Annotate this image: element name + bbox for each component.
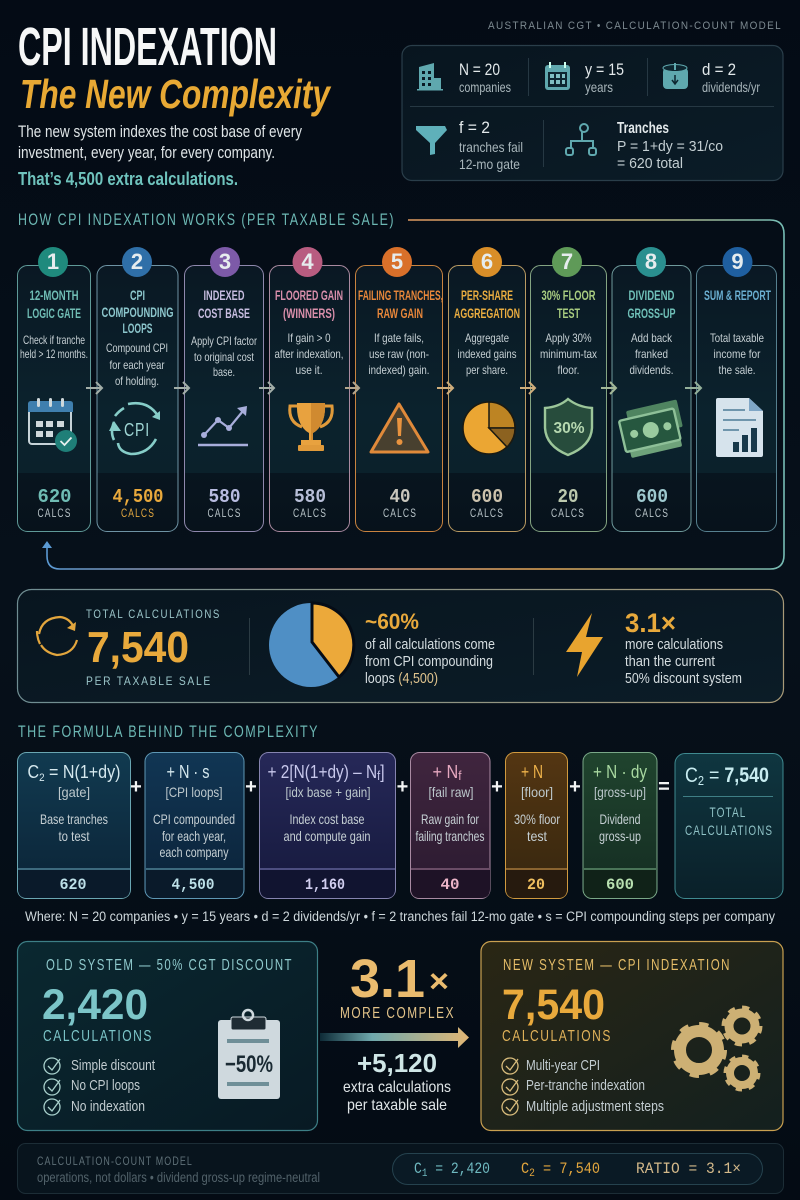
step 4: 4	[301, 249, 314, 274]
icon: calendar	[545, 62, 570, 90]
step 6: per share.	[466, 363, 508, 377]
step 8: franked	[635, 347, 668, 361]
comparison: 3.1x: MORE COMPLEX	[340, 1005, 455, 1022]
operator: +	[245, 776, 257, 798]
subtitle: The New Complexity	[20, 71, 332, 117]
step 7: 30% FLOOR	[542, 288, 596, 303]
term: index base: ]	[380, 762, 384, 782]
step 2	[97, 247, 178, 532]
footer: operations, not dollars • dividend gross-up regime-neutral	[37, 1170, 320, 1185]
heading: how it works: HOW CPI INDEXATION WORKS (PER TAXABLE SALE)	[18, 210, 395, 229]
stat: 3.1x: 50% discount system	[625, 671, 742, 687]
stat: failing tranches: 12-mo gate	[459, 156, 520, 172]
intro text: That’s 4,500 extra calculations.	[18, 169, 238, 189]
step 3: to original cost	[194, 350, 255, 364]
term: fail raw: failing tranches	[416, 828, 484, 844]
step 2: for each year	[110, 358, 164, 372]
step 5: indexed) gain.	[368, 363, 430, 377]
term: gate: C	[28, 762, 40, 782]
step 6	[448, 247, 526, 532]
title	[18, 17, 332, 117]
term: gross-up: [gross-up]	[594, 784, 646, 800]
icon: pie	[463, 402, 515, 454]
stat: tranches	[617, 120, 723, 172]
step 9: income for	[714, 347, 760, 361]
step 4: (WINNERS)	[283, 306, 335, 321]
stat: tranches: P = 1+dy = 31/co	[617, 138, 723, 155]
term: gate: 620	[60, 876, 86, 894]
step 7: 7	[561, 249, 573, 274]
step 6: Aggregate	[465, 331, 509, 345]
stat: tranches: = 620 total	[617, 155, 683, 172]
step 5: CALCS	[383, 508, 417, 520]
step 4: FLOORED GAIN	[275, 288, 343, 303]
term: gate: Base tranches	[40, 811, 108, 827]
results pill: 1	[422, 1168, 428, 1180]
intro text: investment, every year, for every company.	[18, 144, 275, 162]
step 7: minimum-tax	[540, 347, 597, 361]
checklist: No indexation	[71, 1099, 145, 1115]
panel: new system: CALCULATIONS	[502, 1028, 612, 1045]
icon: CPI loop: CPI	[124, 420, 150, 440]
operator: =	[658, 776, 670, 798]
term: floor: [floor]	[521, 784, 553, 800]
step 8: 600	[636, 486, 668, 508]
panel: new system: 7,540	[502, 981, 605, 1029]
step 4: after indexation,	[274, 347, 344, 361]
step 2: Compound CPI	[106, 341, 168, 355]
stat: total calculations: 7,540	[87, 623, 189, 672]
step 7: CALCS	[551, 508, 585, 520]
step 3: CALCS	[208, 508, 242, 520]
step 4	[270, 247, 350, 532]
step 9: 9	[731, 249, 744, 274]
stat: 60 percent: of all calculations come	[365, 637, 495, 653]
step 8: dividends.	[630, 363, 674, 377]
step 1: 12-MONTH	[30, 288, 78, 303]
operator: +	[397, 776, 408, 798]
term: index base: Index cost base	[290, 811, 365, 827]
stat: companies	[459, 60, 511, 95]
title: CPI INDEXATION	[18, 17, 277, 77]
term: total: TOTAL	[710, 804, 746, 820]
stat: dividends	[702, 60, 760, 95]
term: fail raw	[410, 752, 490, 898]
panel: model inputs	[402, 46, 783, 180]
operator: +	[130, 776, 142, 798]
stat: companies: companies	[459, 79, 511, 95]
step 1: LOGIC GATE	[27, 306, 81, 321]
icon: banknotes	[617, 399, 687, 459]
term: index base: f	[377, 768, 381, 783]
step 7	[530, 247, 606, 532]
stat: total calculations: TOTAL CALCULATIONS	[86, 607, 221, 621]
icon: report	[716, 398, 763, 457]
stat: 60 percent: loops (4,500)	[365, 671, 438, 687]
checklist: Multi-year CPI	[526, 1058, 600, 1074]
step 9: Total taxable	[710, 331, 764, 345]
operator: +	[569, 776, 581, 798]
step 4: 580	[294, 486, 326, 508]
step 3	[184, 247, 264, 532]
pie chart: share of calculations	[269, 603, 354, 687]
stat: tranches: Tranches	[617, 120, 669, 137]
checklist: No CPI loops	[71, 1078, 140, 1094]
panel: new system	[481, 942, 783, 1130]
step 1: 1	[47, 249, 59, 274]
icon: shield: 30%	[554, 420, 584, 437]
stat: years: years	[585, 79, 613, 95]
term: CPI loops: 4,500	[172, 876, 214, 894]
icon: CPI loop	[109, 403, 160, 454]
term: floor: 30% floor	[514, 811, 560, 827]
arrow: old to new	[320, 1027, 469, 1048]
panel: new system: NEW SYSTEM — CPI INDEXATION	[503, 957, 731, 974]
step 2: of holding.	[115, 374, 159, 388]
stat: 60 percent: from CPI compounding	[365, 654, 493, 670]
arrow: loop back	[42, 541, 784, 569]
step 8	[612, 247, 691, 532]
term: floor: + N	[521, 762, 543, 782]
comparison: 3.1x: 3.1	[350, 949, 425, 1009]
step 3: COST BASE	[198, 306, 250, 321]
step 2: CPI	[130, 288, 145, 303]
term: fail raw: + N	[432, 762, 461, 782]
comparison: 3.1x	[320, 949, 469, 1114]
stat: 3.1x: more calculations	[625, 637, 723, 653]
step 2: CALCS	[121, 508, 155, 520]
footer: CALCULATION-COUNT MODEL	[37, 1154, 193, 1168]
icon: rising chart	[198, 406, 248, 445]
stat: companies: N = 20	[459, 60, 500, 79]
term: index base: [idx base + gain]	[286, 784, 370, 800]
term: CPI loops: each company	[160, 844, 228, 860]
panel: formula	[18, 752, 783, 898]
step 7: floor.	[558, 363, 580, 377]
stat: 60 percent: ~60%	[365, 609, 419, 634]
step 1: CALCS	[38, 508, 72, 520]
comparison: 3.1x: per taxable sale	[347, 1097, 447, 1114]
panel: step cards	[18, 247, 776, 532]
comparison: 3.1x: ×	[429, 963, 449, 999]
step 6: indexed gains	[458, 347, 516, 361]
term: CPI loops	[145, 752, 244, 898]
icon: funnel	[416, 126, 447, 155]
term: CPI loops: [CPI loops]	[166, 784, 222, 800]
icon: tree	[566, 124, 596, 155]
icon: dividend pot	[663, 63, 688, 89]
step 6: PER-SHARE	[461, 288, 513, 303]
stat: dividends: dividends/yr	[702, 79, 760, 95]
panel: old system: OLD SYSTEM — 50% CGT DISCOUNT	[46, 957, 293, 974]
step 2: COMPOUNDING	[102, 305, 174, 320]
step 8: CALCS	[635, 508, 669, 520]
term: total: 2	[698, 773, 704, 788]
step 5: 5	[391, 249, 403, 274]
step 6: AGGREGATION	[454, 306, 520, 321]
comparison: 3.1x: +5,120	[357, 1048, 437, 1078]
stat: 3.1x: than the current	[625, 654, 715, 670]
icon: cycle	[37, 617, 77, 655]
term: fail raw: 40	[440, 876, 460, 894]
results pill: 2	[529, 1168, 535, 1180]
step 8: Add back	[631, 331, 673, 345]
stat: years	[585, 60, 624, 95]
term: gate: = N(1+dy)	[45, 762, 120, 782]
term: index base	[260, 752, 396, 898]
step 4: use it.	[296, 363, 322, 377]
icon: lightning bolt	[566, 613, 603, 677]
step 7: TEST	[557, 306, 580, 321]
step 5: RAW GAIN	[377, 306, 423, 321]
panel: totals	[18, 590, 784, 702]
step 1	[18, 247, 90, 532]
step 8: 8	[645, 249, 657, 274]
term: floor: test	[527, 828, 547, 844]
icon: clipboard	[218, 1010, 280, 1099]
step 1: Check if tranche	[23, 333, 85, 347]
stat: failing tranches: tranches fail	[459, 139, 523, 155]
term: gate: [gate]	[58, 784, 90, 800]
results pill: = 7,540	[535, 1160, 600, 1178]
stat: 60 percent	[365, 609, 495, 687]
step 7: 20	[558, 486, 578, 508]
term: gross-up: gross-up	[599, 828, 641, 844]
term: gate	[18, 752, 130, 898]
step 3: 3	[219, 249, 231, 274]
step 7: Apply 30%	[546, 331, 592, 345]
step 2: 2	[131, 249, 143, 274]
intro text	[18, 123, 303, 189]
comparison: 3.1x: extra calculations	[343, 1079, 451, 1096]
term: gate: to test	[58, 828, 90, 844]
stat: years: y = 15	[585, 60, 624, 79]
term: floor	[506, 752, 568, 898]
step 6: CALCS	[470, 508, 504, 520]
step 6: 600	[471, 486, 503, 508]
step 8: DIVIDEND	[628, 288, 675, 303]
step 3: Apply CPI factor	[191, 334, 257, 348]
term: fail raw: [fail raw]	[428, 784, 474, 800]
checklist: Simple discount	[71, 1058, 155, 1074]
step 1: 620	[38, 486, 72, 508]
step 1: held > 12 months.	[20, 347, 88, 361]
step 2: LOOPS	[122, 321, 152, 336]
checklist: Multiple adjustment steps	[526, 1099, 664, 1115]
term: CPI loops: for each year,	[162, 828, 226, 844]
stat: 3.1x: 3.1×	[625, 608, 676, 638]
term: gross-up	[583, 752, 657, 898]
step 3: base.	[213, 365, 235, 379]
term: index base: + 2[N(1+dy) – N	[268, 762, 396, 782]
step 5: 40	[390, 486, 410, 508]
checklist	[502, 1058, 664, 1115]
term: total: =	[704, 764, 724, 787]
step 8: GROSS-UP	[628, 306, 676, 321]
step 4: If gain > 0	[288, 331, 331, 345]
term: gross-up: Dividend	[600, 811, 640, 827]
step 9	[696, 247, 776, 532]
step 5: FAILING TRANCHES,	[358, 288, 443, 303]
stat: total calculations: PER TAXABLE SALE	[86, 674, 212, 688]
step 6: 6	[481, 249, 493, 274]
step 2: 4,500	[112, 486, 164, 508]
arrow: loop top	[408, 220, 784, 555]
step 9: the sale.	[718, 363, 756, 377]
stat: total calculations	[86, 607, 221, 688]
term: CPI loops: + N · s	[166, 762, 210, 782]
step 3: INDEXED	[204, 288, 245, 303]
term: fail raw: Raw gain for	[421, 811, 479, 827]
stat: 3.1x	[625, 608, 742, 687]
icon: building	[417, 63, 443, 90]
footer	[18, 1144, 784, 1194]
term: total: 7,540	[724, 764, 777, 787]
icon: calendar check	[28, 398, 77, 452]
results pill: = 2,420	[427, 1160, 490, 1178]
icon: trophy	[290, 403, 332, 451]
stat: failing tranches	[459, 118, 523, 172]
icon: gears	[674, 1008, 760, 1089]
checklist: Per-tranche indexation	[526, 1078, 645, 1094]
icon: shield	[545, 399, 592, 455]
term: gate: 2	[39, 772, 45, 784]
icon: clipboard: −50%	[225, 1051, 273, 1078]
results pill	[392, 1154, 762, 1184]
arrows between steps	[86, 382, 701, 394]
results pill: RATIO = 3.1×	[636, 1160, 741, 1178]
term: floor: 20	[527, 876, 545, 894]
heading: formula: THE FORMULA BEHIND THE COMPLEXITY	[18, 722, 319, 741]
term: fail raw: f	[458, 768, 462, 783]
step 4: CALCS	[293, 508, 327, 520]
term: CPI loops: CPI compounded	[153, 811, 235, 827]
step 3: 580	[208, 486, 240, 508]
term: total: C	[685, 764, 698, 787]
step 5: If gate fails,	[374, 331, 424, 345]
term: total	[675, 754, 783, 898]
icon: warning	[371, 404, 428, 452]
stat: dividends: d = 2	[702, 60, 736, 79]
results pill: C	[414, 1160, 423, 1178]
results pill: C	[521, 1160, 530, 1178]
panel: old system: 2,420	[42, 981, 148, 1029]
panel: old system	[18, 942, 318, 1130]
term: gross-up: + N · dy	[593, 762, 647, 782]
stat: failing tranches: f = 2	[459, 118, 490, 137]
panel: old system: CALCULATIONS	[43, 1028, 153, 1045]
operator: +	[491, 776, 503, 798]
step 5	[356, 247, 443, 532]
term: index base: and compute gain	[284, 828, 370, 844]
term: index base: 1,160	[305, 876, 345, 894]
intro text: The new system indexes the cost base of every	[18, 123, 303, 141]
checklist	[44, 1058, 155, 1115]
term: gross-up: 600	[606, 876, 634, 894]
step 5: use raw (non-	[369, 347, 429, 361]
